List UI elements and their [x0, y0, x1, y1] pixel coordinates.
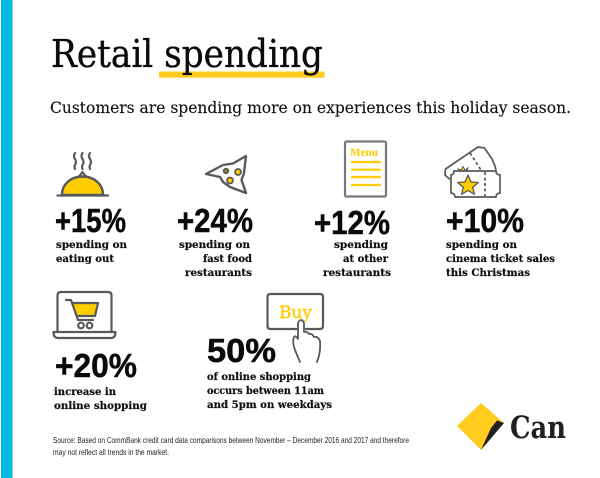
icon: cloche	[58, 153, 108, 196]
panel: fast food	[177, 156, 253, 279]
label: fast food: spending on	[179, 240, 251, 251]
panel: cinema	[445, 147, 555, 279]
label: fast food: restaurants	[185, 268, 252, 279]
label: peak hours: of online shopping	[207, 372, 311, 383]
label: online shopping	[54, 387, 147, 412]
label: fast food: fast food	[203, 254, 252, 265]
label: online shopping: online shopping	[54, 401, 147, 412]
icon: pizza slice	[206, 156, 246, 193]
stat: +12%: +12%	[314, 204, 390, 241]
icon: menu: Menu	[350, 145, 378, 159]
label: cinema: cinema ticket sales	[446, 254, 555, 265]
subtitle: Customers are spending more on experiences this holiday season.	[50, 99, 571, 117]
logo: Can: Can	[510, 410, 566, 446]
stat: +20%: +20%	[55, 347, 137, 384]
panel: online shopping	[54, 292, 147, 412]
label: peak hours	[207, 372, 332, 411]
stat: +24%: +24%	[177, 202, 253, 239]
label: other restaurants: restaurants	[323, 268, 391, 279]
source note	[53, 435, 409, 457]
stat: 50%: 50%	[207, 332, 276, 369]
stat: +10%: +10%	[446, 202, 524, 239]
label: other restaurants: spending	[334, 240, 388, 251]
label: peak hours: occurs between 11am	[207, 386, 324, 397]
panel: other restaurants	[314, 142, 391, 279]
title: Retail spending	[51, 32, 323, 76]
label: eating out	[56, 240, 128, 265]
label: other restaurants	[323, 240, 391, 279]
label: other restaurants: at other	[343, 254, 389, 265]
label: cinema: spending on	[446, 240, 518, 251]
panel: peak shopping hours	[207, 294, 332, 411]
icon: laptop with cart	[54, 292, 116, 338]
label: peak hours: and 5pm on weekdays	[207, 400, 332, 411]
source note: may not reflect all trends in the market.	[53, 447, 169, 457]
label: online shopping: increase in	[54, 387, 117, 398]
label: cinema: this Christmas	[446, 268, 530, 279]
label: eating out: eating out	[56, 254, 114, 265]
label: fast food	[179, 240, 252, 279]
label: cinema	[446, 240, 555, 279]
source note: Source: Based on CommBank credit card data comparisons between November – December 2016 and 2017 and therefore	[53, 435, 409, 445]
left accent bar	[1, 0, 12, 478]
label: eating out: spending on	[56, 240, 128, 251]
icon: buy button with hand: Buy	[279, 303, 312, 323]
stat: +15%: +15%	[55, 202, 126, 239]
logo: Can	[457, 403, 566, 450]
panel: eating out	[55, 153, 128, 265]
icon: cinema tickets	[445, 147, 500, 197]
